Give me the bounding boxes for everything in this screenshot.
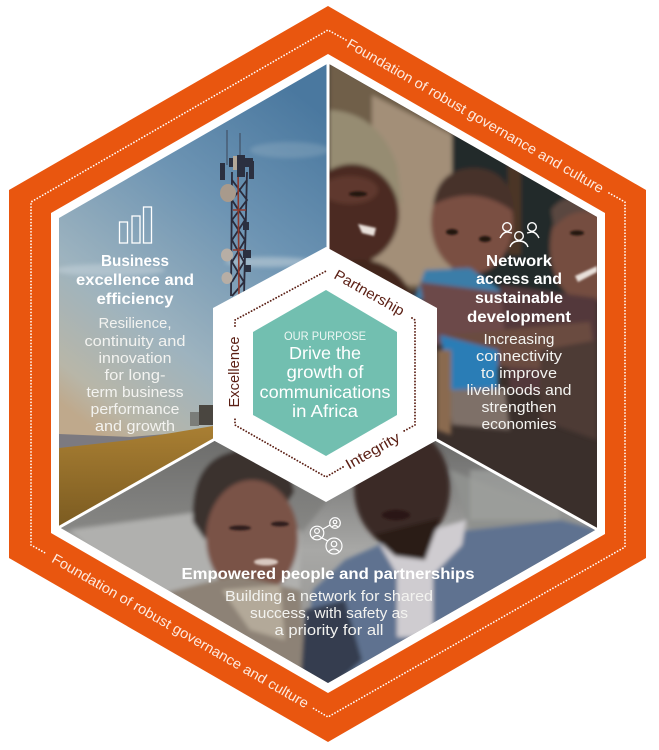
text block: business excellence: Resilience,	[98, 315, 172, 332]
text block: business excellence: continuity and	[84, 333, 186, 350]
icon: connected people network	[310, 518, 342, 554]
teal purpose hexagon	[253, 290, 397, 456]
purpose text: communications	[260, 382, 391, 402]
text block: business excellence: performance	[90, 401, 180, 418]
text block: business excellence: Business	[101, 253, 169, 270]
brown dotted ring	[235, 270, 415, 477]
text block: network access: sustainable	[475, 290, 563, 307]
text block: network access: Increasing	[484, 331, 554, 348]
centre white hexagon	[213, 247, 437, 502]
white dividers between photo panels	[58, 62, 598, 530]
thin clouds	[55, 142, 330, 276]
text block: network access: development	[467, 309, 572, 326]
band label top right: Foundation of robust governance and culture	[344, 35, 607, 196]
text block: empowered people	[182, 566, 475, 639]
icon: group of people	[500, 223, 539, 247]
purpose text	[260, 329, 391, 421]
text block: business excellence: term business	[86, 384, 184, 401]
text block: network access: economies	[482, 416, 556, 433]
text block: network access: strengthen	[482, 399, 556, 416]
telecom tower	[220, 130, 254, 296]
text block: network access: connectivity	[476, 348, 563, 365]
facial features	[229, 510, 410, 566]
hilltop building	[190, 405, 215, 426]
panel: network access photo (family with tablet)	[330, 64, 597, 528]
purpose text: OUR PURPOSE	[284, 329, 366, 343]
text block: network access	[466, 253, 572, 433]
text block: business excellence: for long-	[104, 367, 166, 384]
inner white hexagon	[51, 54, 605, 693]
blurred photo shapes	[330, 64, 597, 440]
text block: empowered people: Building a network for shared	[225, 588, 433, 605]
text block: empowered people: Empowered people and partnerships	[182, 566, 475, 583]
text block: network access: livelihoods and	[466, 382, 572, 399]
value label: Partnership: Partnership	[331, 267, 407, 320]
text block: network access: access and	[476, 271, 562, 288]
smiles and eyes	[358, 224, 597, 282]
panel: empowered people photo (two colleagues)	[60, 441, 596, 683]
panel: business excellence photo (tower against sky)	[55, 64, 330, 530]
band label bottom left: Foundation of robust governance and culture	[49, 550, 312, 711]
purpose text: Drive the	[289, 343, 361, 363]
text block: business excellence: excellence and	[76, 272, 194, 289]
text block: business excellence: efficiency	[96, 291, 174, 308]
text block: business excellence: innovation	[98, 350, 172, 367]
text block: business excellence: and growth	[95, 418, 175, 435]
grass field	[59, 426, 213, 530]
value label: Integrity: Integrity	[343, 429, 404, 473]
text block: network access: Network	[486, 253, 552, 270]
text block: empowered people: success, with safety as	[250, 605, 408, 622]
text block: empowered people: a priority for all	[274, 622, 384, 639]
icon: bar chart	[120, 207, 152, 243]
purpose text: in Africa	[292, 401, 358, 421]
text block: network access: to improve	[481, 365, 557, 382]
distant hills	[59, 434, 165, 448]
purpose text: growth of	[286, 362, 364, 382]
text block: business excellence	[76, 253, 194, 435]
value label: Excellence: Excellence	[227, 336, 243, 408]
